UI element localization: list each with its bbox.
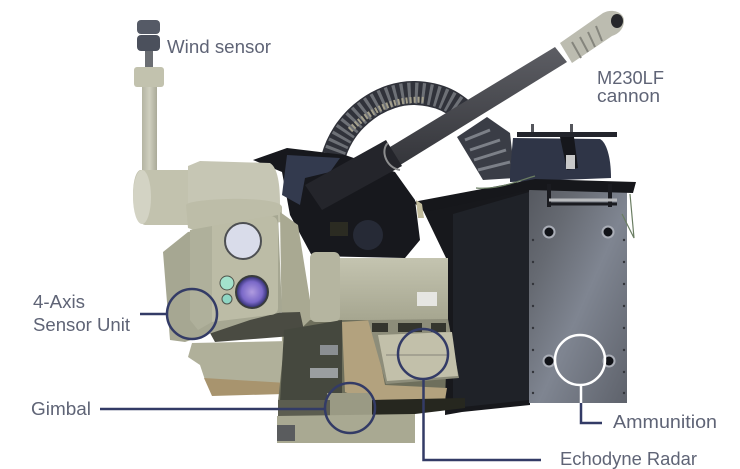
- callout: Gimbal: Gimbal: [31, 399, 91, 419]
- callout: Ammunition: Ammunition: [613, 412, 717, 432]
- handle: [549, 184, 610, 207]
- gun receiver: [253, 148, 424, 258]
- ammunition box: [413, 124, 636, 415]
- bolts: [544, 226, 614, 366]
- turret base: [188, 341, 290, 384]
- dark side panel: [421, 182, 530, 415]
- callout: Echodyne Radar: Echodyne Radar: [560, 449, 697, 469]
- callout: Echodyne Radar: [398, 329, 697, 469]
- latch wire: [476, 176, 634, 238]
- callout: Gimbal: [31, 383, 375, 433]
- callout: Ammunition: [555, 335, 717, 432]
- barrel: [305, 11, 624, 210]
- callout: M230LF cannon: M230LF: [597, 68, 664, 88]
- rivets: [532, 239, 625, 394]
- shadow under sensor box: [200, 312, 305, 342]
- callout: M230LF cannon: cannon: [597, 86, 660, 106]
- top rim: [413, 179, 636, 212]
- feed chute: [333, 93, 515, 180]
- metal end plate: [529, 183, 627, 403]
- box lid: [510, 138, 611, 182]
- dark lower strip: [372, 398, 465, 418]
- callout: 4-Axis Sensor Unit: Sensor Unit: [33, 315, 130, 335]
- callout: 4-Axis Sensor Unit: [33, 289, 217, 339]
- radar panel: [368, 319, 459, 384]
- callout: M230LF cannon: [597, 68, 664, 106]
- base plate: [277, 414, 415, 443]
- main drum and gimbal body: [277, 252, 465, 443]
- callout: 4-Axis Sensor Unit: 4-Axis: [33, 292, 85, 312]
- callout: Wind sensor: Wind sensor: [167, 37, 271, 57]
- muzzle brake: [560, 11, 624, 63]
- sensor turret: [133, 161, 310, 396]
- sensor box: [163, 215, 282, 342]
- wind sensor mast: [134, 20, 164, 171]
